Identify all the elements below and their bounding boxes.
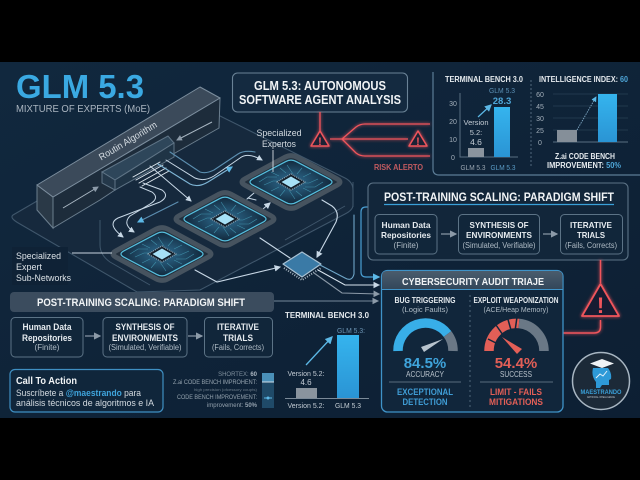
step: synthesis: ENVIRONMENTS — [112, 333, 178, 343]
chart: terminal bench top: 5.2: — [470, 128, 482, 137]
arrow — [188, 335, 202, 337]
logo: maestrando: MAESTRANDO — [580, 390, 622, 396]
step: synthesis: ENVIRONMENTS — [466, 230, 532, 240]
panel: benchmarks top right — [433, 72, 640, 175]
chart: terminal bench top: 0 — [451, 155, 455, 162]
title: GLM 5.3 — [16, 68, 144, 105]
small metrics legend: SHORTEX: 60 — [218, 372, 258, 378]
chart: terminal bench top: GLM 5.3 — [489, 86, 515, 95]
chart: intelligence index — [536, 75, 628, 170]
specialized expert sub-networks label: Specialized — [16, 251, 61, 262]
chart: terminal bench top: 4.6 — [470, 137, 482, 147]
step: human data: (Finite) — [35, 343, 60, 352]
column: bug triggering: (Logic Faults) — [402, 305, 449, 314]
chart: terminal bench bottom: Version 5.2: — [288, 401, 324, 410]
chart: terminal bench top: 20 — [449, 119, 457, 126]
logo: maestrando: ARTIFICIAL INTELLIGENCE — [587, 396, 615, 399]
column: bug triggering: ACCURACY — [406, 370, 445, 379]
step: human data: Repositories — [22, 333, 72, 343]
chart: intelligence index: 60 — [536, 92, 544, 99]
column: exploit weaponization: EXPLOIT WEAPONIZATION — [474, 296, 559, 305]
step: iterative trials: (Fails, Corrects) — [212, 343, 264, 352]
warning icon: left — [311, 131, 329, 148]
banner heading — [10, 292, 274, 312]
step: iterative trials: TRIALS — [223, 333, 253, 343]
step: iterative trials — [560, 214, 622, 254]
specialized expert sub-networks label: Sub-Networks — [16, 273, 71, 284]
arrow — [543, 233, 557, 235]
step: synthesis — [458, 214, 540, 254]
step: iterative trials: (Fails, Corrects) — [565, 241, 617, 250]
step: iterative trials: ITERATIVE — [217, 322, 259, 332]
specialized expert sub-networks label: Expert — [16, 262, 42, 273]
column: bug triggering — [389, 296, 461, 408]
small metrics legend: Z.ai CODE BENCH IMPROHENT: — [173, 380, 257, 386]
panel: post-training scaling left — [10, 292, 274, 357]
router label: Routin Algorithm — [97, 120, 159, 163]
chart: terminal bench top: TERMINAL BENCH 3.0 — [445, 75, 523, 84]
chart: terminal bench top — [445, 75, 523, 172]
specialized expertos label — [256, 128, 302, 172]
column: exploit weaponization: MITIGATIONS — [489, 397, 543, 408]
step: synthesis: SYNTHESIS OF — [116, 322, 175, 332]
chart: terminal bench bottom: TERMINAL BENCH 3.0 — [285, 310, 369, 320]
routing lines from router to chips — [113, 151, 270, 237]
small metrics legend — [173, 372, 258, 409]
gauge: accuracy — [398, 323, 453, 351]
chart: terminal bench bottom — [285, 310, 369, 410]
chart: intelligence index: 25 — [536, 128, 544, 135]
chart: terminal bench top: 10 — [449, 137, 457, 144]
logo: maestrando — [572, 352, 630, 410]
call to action: análisis técnicos de algoritmos e IA — [16, 398, 155, 409]
chart: terminal bench bottom: 4.6 — [300, 378, 312, 387]
column: exploit weaponization: (ACE/Heap Memory) — [484, 305, 549, 314]
header box: GLM 5.3: AUTONOMOUS — [254, 78, 386, 93]
chart: intelligence index: 30 — [536, 116, 544, 123]
chart: intelligence index: 0 — [538, 140, 542, 147]
step: human data — [11, 318, 83, 357]
column: exploit weaponization: SUCCESS — [500, 370, 532, 379]
isometric platform — [12, 109, 353, 292]
header box: SOFTWARE AGENT ANALYSIS — [239, 92, 401, 107]
arrow — [85, 335, 100, 337]
step: synthesis: (Simulated, Verifiable) — [108, 343, 182, 352]
small metrics legend: high precision (ofcessory coupts) — [194, 387, 258, 392]
specialized expert sub-networks label — [12, 247, 112, 285]
mini gauge bar — [262, 373, 274, 408]
risk alert label: RISK ALERTO — [374, 163, 423, 172]
subtitle: MIXTURE OF EXPERTS (MoE) — [16, 103, 150, 115]
step: human data: Repositories — [381, 230, 431, 240]
step: synthesis: (Simulated, Verifiable) — [462, 241, 536, 250]
chart: intelligence index: Z.ai CODE BENCH — [555, 152, 615, 161]
column: bug triggering: DETECTION — [402, 397, 448, 408]
warning icon: left: ! — [318, 136, 322, 148]
warning icon: right: ! — [416, 136, 420, 148]
audit heading: CYBERSECURITY AUDIT TRIAJE — [402, 277, 544, 288]
chart: intelligence index: IMPROVEMENT: 50% — [547, 161, 621, 170]
column: exploit weaponization: LIMIT - FAILS — [490, 387, 542, 398]
step: human data: Human Data — [382, 220, 431, 230]
expert chip: top right — [242, 156, 340, 208]
step: human data: Human Data — [22, 322, 72, 332]
risk alert lines — [320, 112, 430, 156]
call to action: Call To Action — [16, 375, 77, 387]
step: iterative trials: TRIALS — [577, 230, 605, 240]
small metrics legend: CODE BENCH IMPROVEMENT: — [177, 395, 257, 401]
step: synthesis: SYNTHESIS OF — [470, 220, 528, 230]
expert chip: bottom left — [113, 228, 211, 280]
chart: terminal bench top: GLM 5.3 — [490, 163, 516, 172]
chart: intelligence index: 45 — [536, 104, 544, 111]
red connector and warning icon: ! — [597, 293, 604, 318]
column: bug triggering: 84.5% — [404, 355, 446, 372]
step: human data — [375, 214, 437, 254]
column: bug triggering: EXCEPTIONAL — [397, 387, 453, 398]
chip output lines and arrows — [195, 200, 379, 301]
header box — [232, 73, 408, 112]
banner heading: POST-TRAINING SCALING: PARADIGM SHIFT — [37, 297, 245, 309]
aggregator chip — [283, 252, 321, 280]
chart: terminal bench top: 28.3 — [493, 96, 511, 107]
chart: terminal bench bottom: GLM 5.3: — [337, 326, 365, 335]
column: exploit weaponization — [474, 296, 559, 408]
step: synthesis — [103, 318, 187, 357]
call to action — [10, 370, 163, 412]
step: iterative trials — [204, 318, 272, 357]
router bar: routing algorithm — [37, 87, 220, 228]
column: bug triggering: BUG TRIGGERING — [394, 296, 456, 305]
specialized expertos label: Expertos — [262, 139, 296, 150]
chart: terminal bench bottom: Version 5.2: — [288, 369, 324, 378]
small metrics legend: improvement: 50% — [207, 403, 258, 409]
background — [0, 62, 640, 418]
step: human data: (Finite) — [394, 241, 419, 250]
panel: post-training scaling right — [368, 183, 628, 260]
chart: terminal bench top: GLM 5.3 — [460, 163, 486, 172]
chart: terminal bench top: Version — [463, 118, 489, 127]
chart: intelligence index: INTELLIGENCE INDEX: 60 — [539, 75, 628, 84]
step: iterative trials: ITERATIVE — [570, 220, 612, 230]
expert chip: middle — [176, 193, 274, 245]
arrow — [441, 233, 456, 235]
specialized expertos label: Specialized — [256, 128, 302, 139]
chart: terminal bench bottom: GLM 5.3 — [335, 401, 361, 410]
call to action: Suscríbete a @maestrando para — [16, 388, 142, 399]
chart: terminal bench top: 30 — [449, 101, 457, 108]
column: exploit weaponization: 54.4% — [495, 355, 537, 372]
red connector and warning icon — [563, 260, 619, 333]
gauge: success — [488, 316, 544, 351]
panel: cybersecurity audit — [382, 270, 563, 412]
panel heading: POST-TRAINING SCALING: PARADIGM SHIFT — [384, 190, 615, 204]
warning icon: right — [409, 131, 427, 148]
